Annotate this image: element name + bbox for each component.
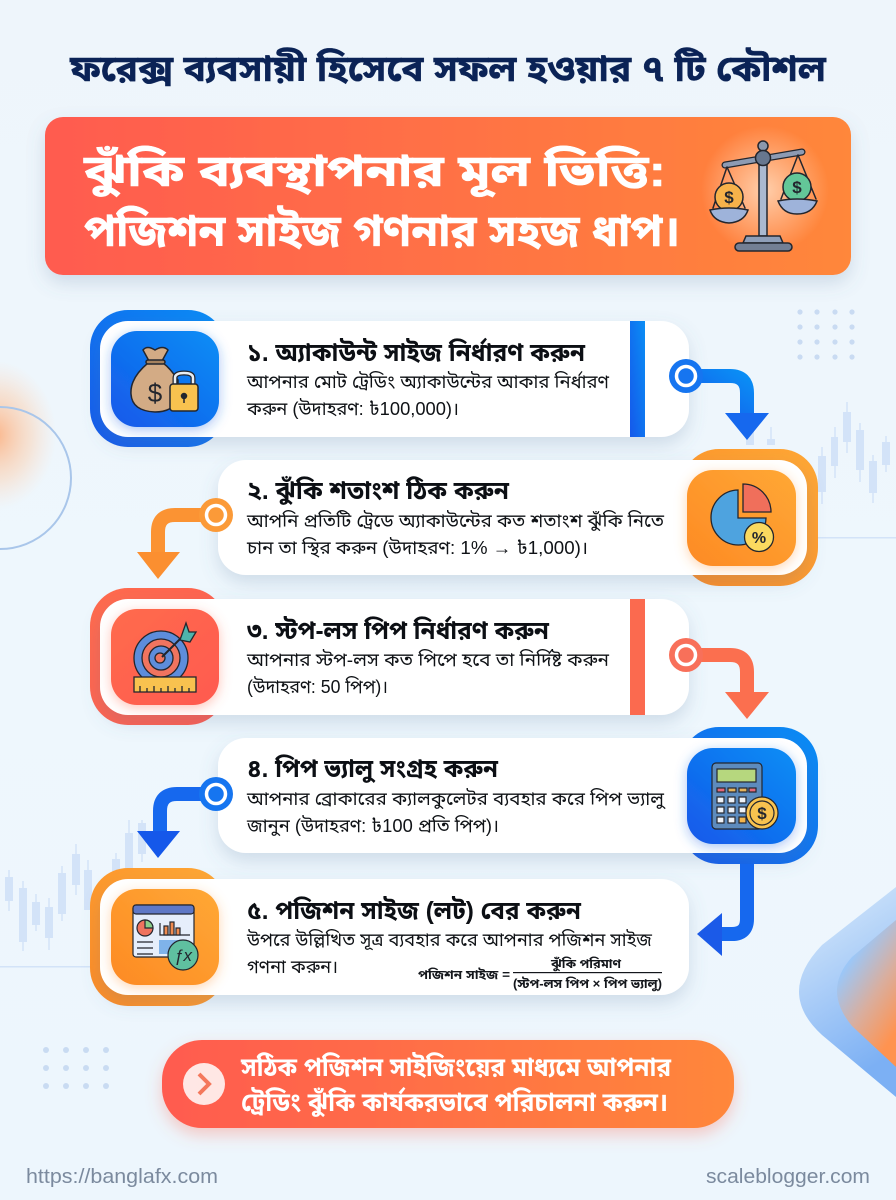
icon: balance scale — [701, 126, 829, 254]
arrow: step 2 to 3 — [137, 498, 233, 579]
decorative diamond bottom right — [799, 887, 896, 1097]
step 3 frame — [90, 588, 226, 725]
step 4 body: জানুন (উদাহরণ: ৳100 প্রতি পিপ)। — [246, 816, 499, 837]
decorative candlesticks left — [0, 820, 146, 968]
position size formula: ঝুঁকি পরিমাণ — [550, 956, 622, 972]
banner — [45, 117, 851, 275]
title: ফরেক্স ব্যবসায়ী হিসেবে সফল হওয়ার ৭ টি কৌশল — [69, 48, 827, 89]
step 1 white card — [100, 321, 689, 437]
step 2 icon: pie chart percent — [687, 470, 796, 566]
decorative orange glow and ring at left — [0, 360, 71, 549]
step 3 white card — [100, 599, 689, 715]
footer left url: https://banglafx.com — [26, 1165, 218, 1188]
step 1 body: করুন (উদাহরণ: ৳100,000)। — [246, 399, 459, 419]
step 2 icon: pie chart percent: % — [752, 530, 766, 547]
call to action text — [240, 1051, 671, 1119]
step 1 icon: money bag and lock — [111, 331, 219, 427]
call to action text: সঠিক পজিশন সাইজিংয়ের মাধ্যমে আপনার — [240, 1051, 671, 1082]
step 3 body — [246, 649, 610, 697]
footer right url: scaleblogger.com — [706, 1165, 870, 1188]
step 4 card — [218, 727, 818, 864]
step 5 heading: ৫. পজিশন সাইজ (লট) বের করুন — [247, 896, 581, 925]
call to action pill — [162, 1040, 734, 1128]
arrow: step 1 to 2 — [669, 359, 769, 440]
step 2 white card — [218, 460, 807, 575]
arrow: step 4 to 3 side — [137, 777, 233, 858]
position size formula: পজিশন সাইজ = — [418, 967, 510, 982]
step 5 frame — [90, 868, 226, 1006]
decorative dots bottom left — [43, 1047, 109, 1089]
step 4 body: আপনার ব্রোকারের ক্যালকুলেটর ব্যবহার করে পিপ ভ্যালু — [246, 789, 666, 810]
icon: balance scale: $ — [724, 188, 734, 207]
step 5 card — [90, 868, 689, 1006]
arrow: step 3 to 4 — [669, 638, 769, 719]
step 3 card — [90, 588, 689, 725]
position size formula: (স্টপ-লস পিপ × পিপ ভ্যালু) — [513, 976, 662, 992]
banner heading: পজিশন সাইজ গণনার সহজ ধাপ। — [84, 205, 680, 256]
step 3 accent bar — [630, 599, 645, 715]
step 4 icon: calculator and coin — [687, 748, 796, 844]
step 2 card — [218, 449, 818, 586]
call to action text: ট্রেডিং ঝুঁকি কার্যকরভাবে পরিচালনা করুন। — [241, 1086, 668, 1119]
decorative dots top right — [797, 309, 855, 360]
step 2 body: চান তা স্থির করুন (উদাহরণ: 1% → ৳1,000)। — [246, 538, 588, 558]
step 4 white card — [218, 738, 807, 853]
step 1 body: আপনার মোট ট্রেডিং অ্যাকাউন্টের আকার নির্ধারণ — [246, 371, 610, 392]
step 1 card — [90, 310, 689, 447]
step 2 body: আপনি প্রতিটি ট্রেডে অ্যাকাউন্টের কত শতাংশ ঝুঁকি নিতে — [246, 511, 664, 532]
step 2 frame — [681, 449, 818, 586]
step 5 icon: dashboard and fx — [111, 889, 219, 985]
step 5 body — [246, 930, 652, 977]
banner heading — [83, 145, 680, 256]
icon: chevron circle — [183, 1063, 225, 1105]
arrow: step 4 to 5 — [697, 864, 747, 956]
step 1 frame — [90, 310, 226, 447]
step 4 icon: calculator and coin: $ — [757, 804, 767, 823]
step 3 heading: ৩. স্টপ-লস পিপ নির্ধারণ করুন — [247, 615, 549, 645]
position size formula — [418, 956, 662, 992]
step 1 body — [246, 371, 610, 419]
step 1 heading: ১. অ্যাকাউন্ট সাইজ নির্ধারণ করুন — [247, 337, 585, 367]
step 5 white card — [100, 879, 689, 995]
banner heading: ঝুঁকি ব্যবস্থাপনার মূল ভিত্তি: — [83, 145, 666, 197]
decorative candlesticks right — [746, 402, 896, 538]
step 4 frame — [681, 727, 818, 864]
step 3 icon: target and ruler — [111, 609, 219, 705]
step 5 body: উপরে উল্লিখিত সূত্র ব্যবহার করে আপনার পজিশন সাইজ — [246, 930, 652, 951]
step 4 heading: ৪. পিপ ভ্যালু সংগ্রহ করুন — [247, 754, 498, 784]
step 3 body: আপনার স্টপ-লস কত পিপে হবে তা নির্দিষ্ট করুন — [246, 649, 610, 670]
step 1 icon: money bag and lock: $ — [148, 378, 163, 408]
step 2 body — [246, 511, 664, 558]
step 5 body: গণনা করুন। — [247, 957, 338, 977]
icon: balance scale: $ — [792, 178, 802, 197]
step 1 accent bar — [630, 321, 645, 437]
step 3 body: (উদাহরণ: 50 পিপ)। — [247, 677, 388, 697]
step 4 body — [246, 789, 666, 837]
step 2 heading: ২. ঝুঁকি শতাংশ ঠিক করুন — [247, 476, 509, 506]
step 5 icon: dashboard and fx: ƒx — [174, 946, 192, 965]
